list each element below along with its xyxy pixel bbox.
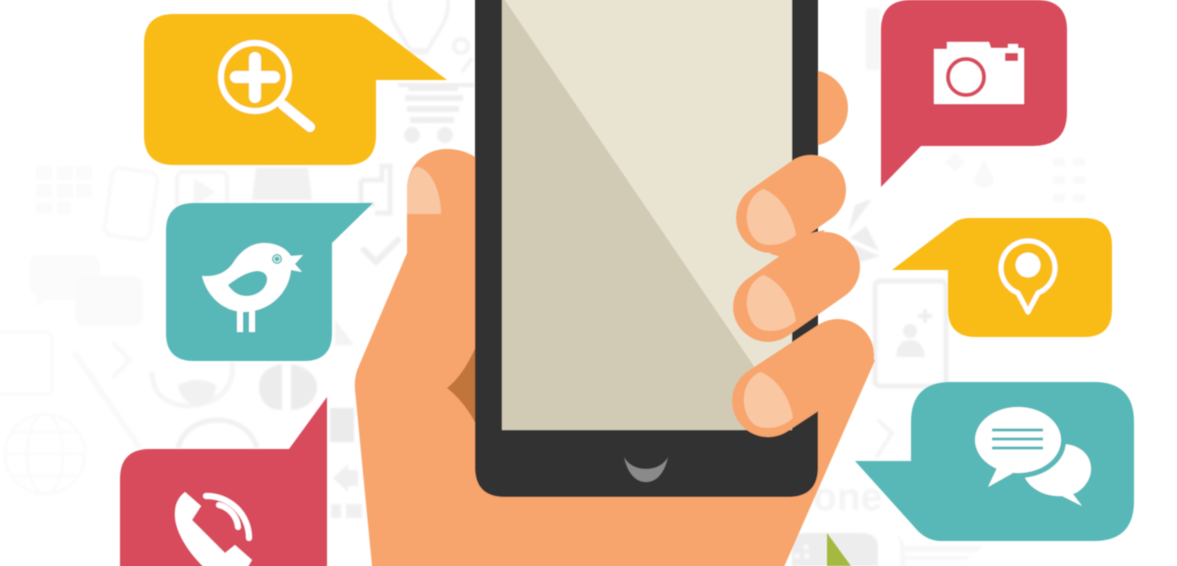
finger: ring bbox=[768, 355, 838, 401]
phone screen bbox=[498, 0, 792, 430]
ghost icon: percent bbox=[454, 39, 472, 72]
ghost icon: check mark bbox=[362, 238, 400, 262]
ghost icon: arrows bbox=[331, 464, 362, 518]
gap filler between index and middle fingers bbox=[770, 230, 825, 262]
ghost icon: gauge bbox=[178, 420, 257, 448]
phone bbox=[475, 0, 818, 497]
ghost icon: tablet with person bbox=[875, 281, 946, 386]
palm side right of phone bbox=[818, 350, 875, 489]
ghost icon: chevron bbox=[112, 342, 130, 378]
home button bbox=[624, 457, 668, 482]
ghost icon: square bbox=[330, 408, 354, 442]
bubble: bird (teal) bbox=[166, 203, 373, 361]
finger: middle bbox=[768, 267, 825, 307]
icon: two chat balloons bbox=[972, 404, 1091, 506]
bubble: phone call (red) bbox=[120, 397, 327, 566]
palm fold shadow bbox=[447, 338, 480, 432]
ghost icon: keyboard bbox=[252, 168, 312, 200]
ghost icon: play box bbox=[177, 172, 227, 212]
ghost icon: shopping cart bbox=[398, 83, 474, 143]
green triangle accent bbox=[827, 533, 851, 566]
hand: palm behind phone bbox=[355, 70, 875, 566]
ghost icon: tablet outline bbox=[0, 332, 52, 394]
ghost icon: globe bbox=[5, 414, 85, 494]
ghost icon: grid bbox=[36, 166, 92, 214]
ghost icon: light bulb bbox=[390, 0, 448, 53]
bubble: location pin (yellow) bbox=[892, 218, 1112, 337]
ghost icon: person silhouette bbox=[866, 8, 880, 70]
ghost icon: arc with heart bbox=[152, 362, 233, 406]
ghost icon: arrow strokes bbox=[876, 420, 892, 458]
icon: magnifying glass with plus bbox=[221, 43, 310, 127]
icon: camera bbox=[934, 42, 1024, 104]
fingernails bbox=[744, 189, 796, 428]
ghost icon: plus-shaped outline bbox=[361, 166, 390, 213]
bubble: magnifier (yellow) bbox=[144, 14, 447, 165]
ghost icon: pie chart bbox=[259, 364, 317, 410]
finger behind phone bbox=[772, 70, 848, 146]
icon: bird bbox=[202, 243, 303, 332]
ghost icon: phone outline bbox=[103, 167, 159, 241]
ghost icon: triangle bbox=[335, 320, 354, 345]
ghost icon: pencil line bbox=[74, 352, 140, 448]
bubble: chat (teal) bbox=[855, 382, 1134, 541]
ghost icon: chat blocks bbox=[30, 255, 143, 326]
ghost icon: origami shape bbox=[842, 199, 880, 262]
ghost text: one: one bbox=[813, 476, 882, 519]
icon: telephone handset with signal arcs bbox=[175, 492, 252, 566]
finger: index bbox=[771, 190, 811, 218]
ghost icons: droplet and diamond bbox=[945, 152, 1085, 202]
thumb nail bbox=[407, 167, 441, 214]
ghost icon: cart bottom bbox=[897, 533, 983, 566]
icon: map pin bbox=[1001, 241, 1055, 312]
ghost icon: gamepad bbox=[792, 533, 878, 566]
bubble: camera (red) bbox=[881, 0, 1067, 187]
hand: fingers over phone bbox=[744, 189, 875, 489]
